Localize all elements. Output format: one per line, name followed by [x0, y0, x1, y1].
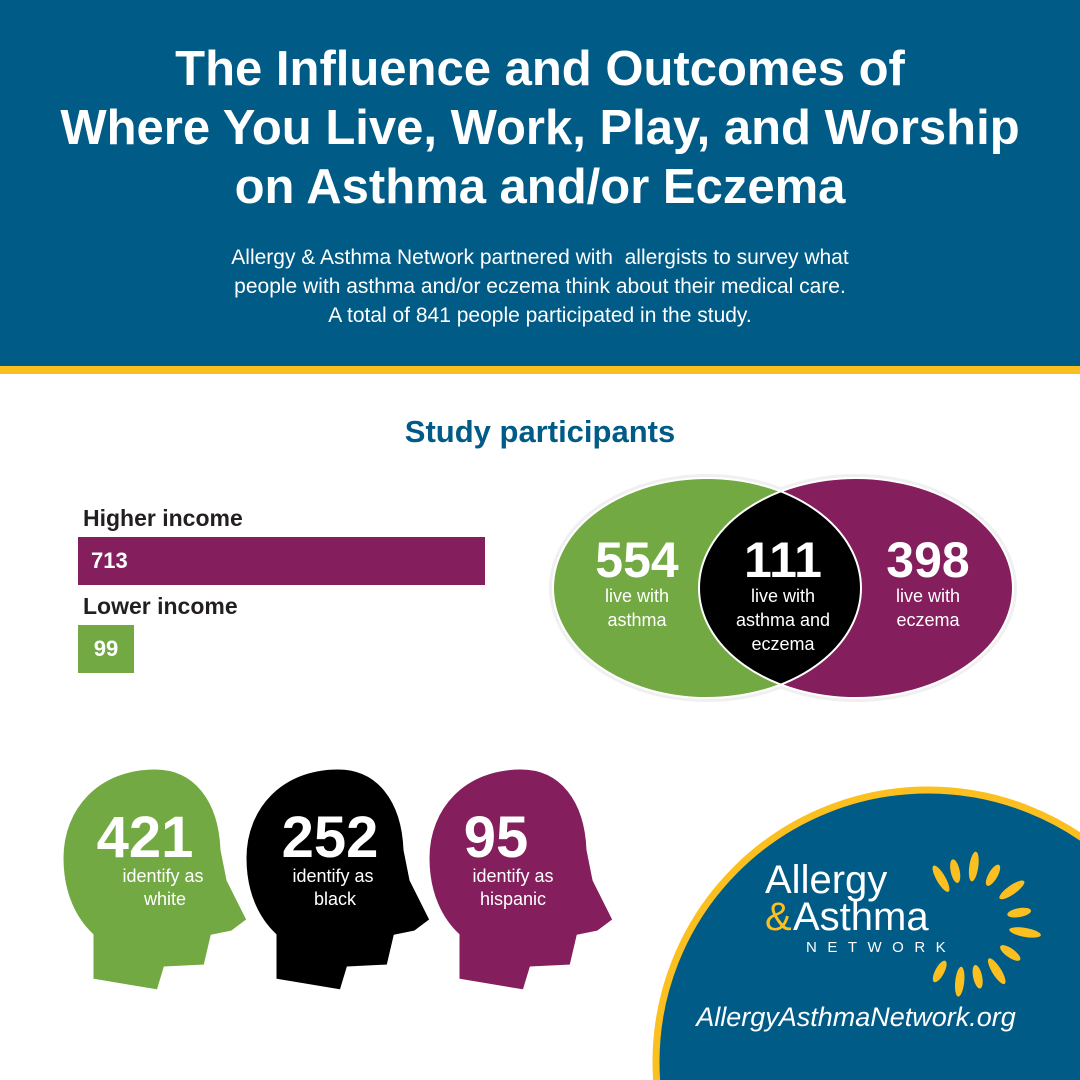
bar 713: 713 — [91, 548, 128, 573]
head: hispanic: hispanic — [480, 889, 546, 909]
head: black: identify as — [292, 866, 374, 886]
venn diagram: 398 — [886, 532, 970, 588]
venn diagram: asthma and — [736, 610, 830, 630]
label higher: Higher income — [83, 505, 243, 531]
head: black: black — [314, 889, 357, 909]
head: black — [245, 768, 431, 991]
head: white: identify as — [122, 866, 204, 886]
logo: & — [765, 895, 792, 939]
logo: Allergy — [765, 858, 887, 902]
venn diagram: live with — [751, 586, 815, 606]
head: hispanic — [428, 768, 614, 991]
venn diagram: asthma — [607, 610, 668, 630]
head: hispanic: 95 — [464, 805, 528, 870]
intro text: Allergy & Asthma Network partnered with allergists to survey what — [231, 246, 849, 269]
intro text: A total of 841 people participated in the study. — [328, 304, 752, 327]
venn diagram: 554 — [595, 532, 679, 588]
label lower: Lower income — [83, 593, 238, 619]
venn diagram: 111 — [744, 532, 822, 588]
head: white: 421 — [97, 805, 193, 870]
logo: NETWORK — [806, 939, 956, 956]
income bar chart — [78, 505, 485, 673]
head: white: white — [143, 889, 186, 909]
bar 713 — [78, 537, 485, 585]
title: Where You Live, Work, Play, and Worship — [60, 101, 1020, 155]
title: on Asthma and/or Eczema — [235, 160, 845, 214]
heads — [64, 770, 612, 990]
section heading: Study participants — [405, 414, 675, 449]
logo — [765, 851, 1042, 997]
intro text — [231, 246, 849, 327]
head: black: 252 — [282, 805, 378, 870]
venn diagram: live with — [896, 586, 960, 606]
head: hispanic: identify as — [472, 866, 554, 886]
intro text: people with asthma and/or eczema think about their medical care. — [234, 275, 846, 298]
bar 99 — [78, 625, 134, 673]
venn diagram: eczema — [751, 634, 816, 654]
bar 99: 99 — [94, 636, 118, 661]
title — [60, 42, 1020, 214]
title: The Influence and Outcomes of — [175, 42, 905, 96]
venn diagram: eczema — [896, 610, 960, 630]
header panel — [0, 0, 1080, 366]
head: white — [62, 768, 248, 991]
venn diagram — [549, 474, 1017, 702]
logo: Asthma — [793, 895, 929, 939]
website url: AllergyAsthmaNetwork.org — [694, 1002, 1016, 1032]
venn diagram: live with — [605, 586, 669, 606]
